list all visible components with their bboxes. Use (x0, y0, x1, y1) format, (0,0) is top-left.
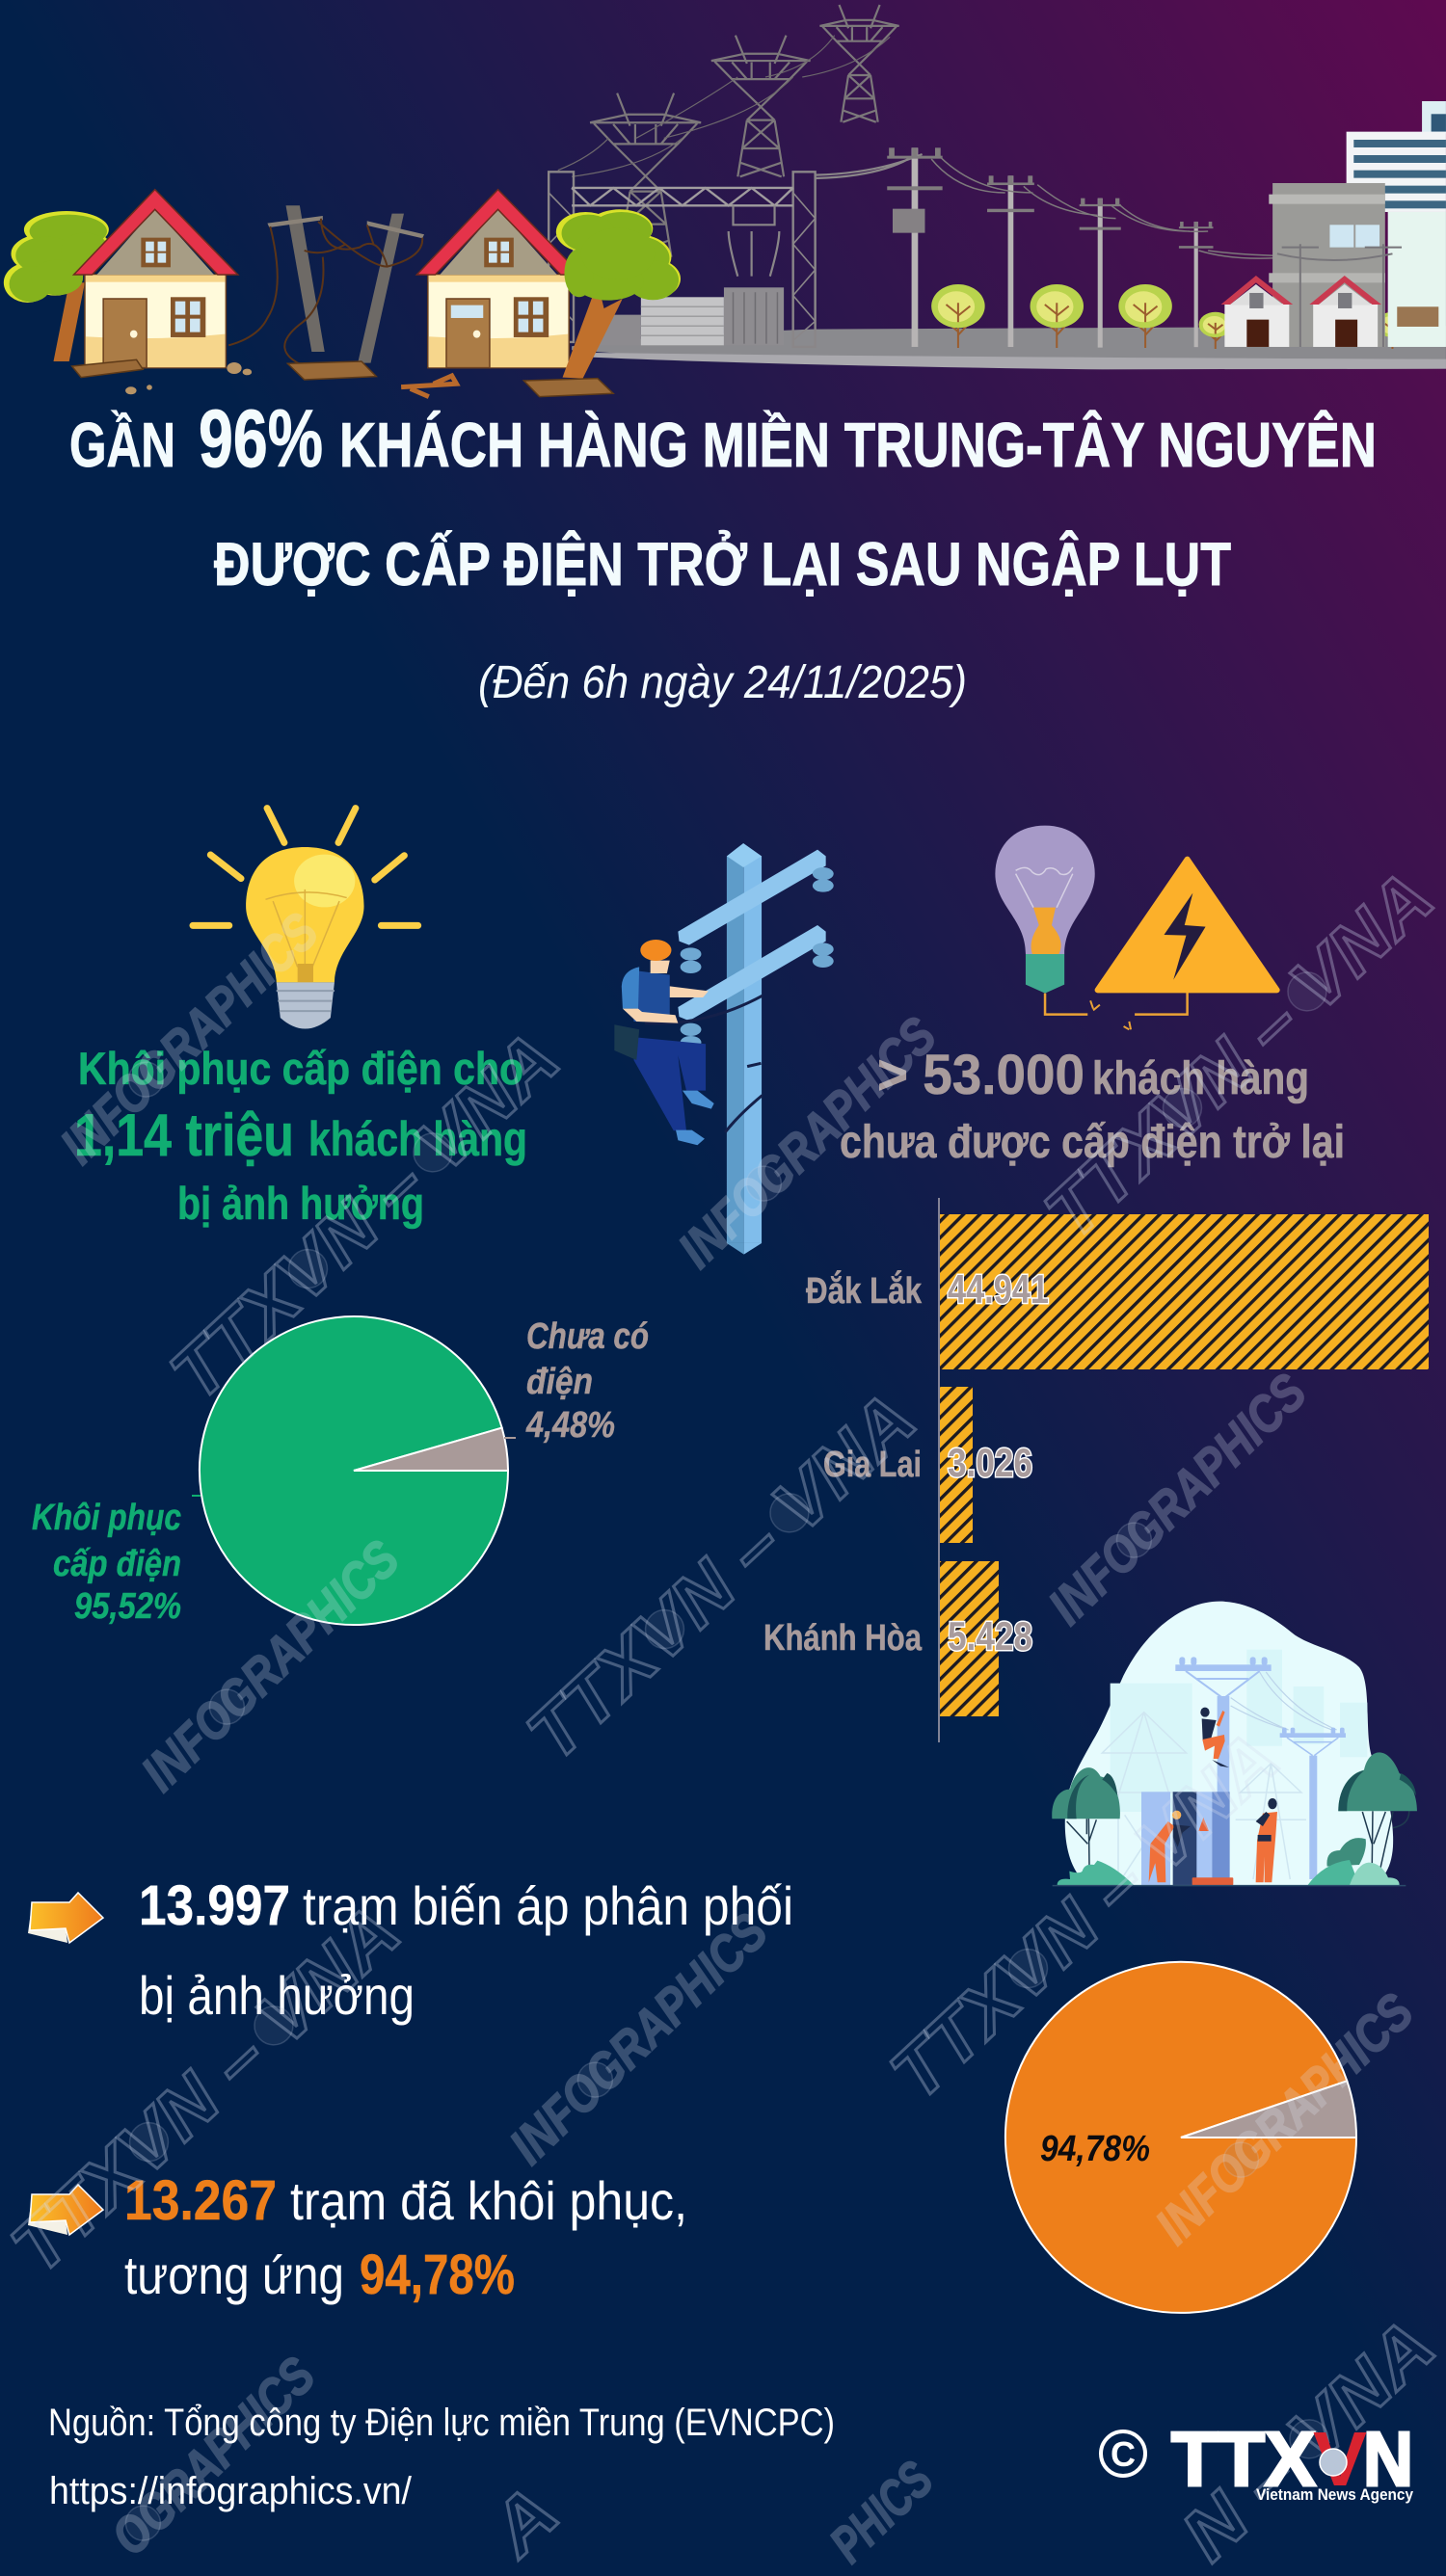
date subtitle: (Đến 6h ngày 24/11/2025) (478, 657, 967, 708)
trees and bushes (1052, 1752, 1417, 1886)
TTXVN logo: N (1363, 2416, 1413, 2502)
text: affected transformer stations: bị ảnh hưởng (139, 1965, 415, 2026)
text: restored transformer stations: tương ứng (124, 2244, 344, 2305)
bar: Khánh Hòa: Khánh Hòa (763, 1618, 923, 1659)
illustration: power grid scene with damaged homes (4, 5, 1446, 397)
title: GẦN (69, 410, 175, 480)
substation gantry and transformer (549, 154, 923, 347)
text: affected transformer stations (139, 1874, 793, 2026)
worker figure (614, 940, 714, 1145)
bar: Khánh Hòa (763, 1561, 1032, 1716)
utility poles (887, 147, 1309, 348)
watermarks: INFOGRAPHICS (499, 1902, 779, 2175)
text: restored transformer stations: 94,78% (360, 2244, 515, 2306)
bar: Đắk Lắk (806, 1214, 1429, 1369)
TTXVN logo: Vietnam News Agency (1256, 2485, 1413, 2504)
transmission towers (558, 5, 899, 257)
icon: glowing light bulb (193, 809, 418, 1029)
source text: https://infographics.vn/ (49, 2470, 413, 2512)
text: customers restored: 1,14 triệu (74, 1102, 294, 1169)
text: customers without power: > 53.000 (877, 1044, 1084, 1106)
text: affected transformer stations: trạm biến áp phân phối (303, 1875, 793, 1936)
watermarks: TTXVN – VNA (0, 1891, 415, 2289)
watermarks: N – VNA (1166, 2304, 1446, 2576)
pie label: no power: 4,48% (525, 1405, 615, 1446)
pie chart: restored share (32, 1316, 649, 1627)
watermarks (0, 857, 1446, 2576)
pie label: restored (32, 1498, 181, 1627)
text: customers without power: chưa được cấp điện trở lại (840, 1117, 1345, 1168)
watermarks: INFOGRAPHICS (50, 902, 330, 1175)
TTXVN logo: TTX (1171, 2416, 1316, 2502)
text: customers restored: Khôi phục cấp điện cho (78, 1043, 523, 1094)
source text (48, 2402, 835, 2512)
watermarks: TTXVN – VNA (875, 1717, 1295, 2115)
watermarks: TTXVN – VNA (155, 1018, 575, 1416)
TTXVN logo: V (1313, 2416, 1367, 2502)
illustration: repair crew at power pole (1052, 1602, 1417, 1886)
broken electric poles with wires (72, 205, 457, 397)
bar: Gia Lai (823, 1387, 1032, 1543)
watermarks: INFOGRAPHICS (1038, 1363, 1318, 1635)
pie label: restored: Khôi phục (32, 1498, 181, 1538)
TTXVN logo (1101, 2416, 1413, 2504)
TTXVN logo: C (1111, 2434, 1136, 2474)
bar: Đắk Lắk: Đắk Lắk (806, 1269, 923, 1312)
illustration: worker climbing electric pole (614, 843, 834, 1255)
bar: Gia Lai: 3.026 (948, 1440, 1032, 1485)
bar: Gia Lai: Gia Lai (823, 1445, 922, 1485)
text: customers without power (840, 1044, 1345, 1168)
text: customers restored: bị ảnh hưởng (177, 1178, 424, 1229)
icon: broken bulb and warning triangle (995, 826, 1277, 1029)
right standing worker (1256, 1798, 1277, 1882)
climbing worker (1200, 1708, 1229, 1767)
city buildings (1221, 101, 1446, 347)
pie label: no power (525, 1316, 649, 1446)
bar: Đắk Lắk: 44.941 (948, 1266, 1049, 1312)
source text: Nguồn: Tổng công ty Điện lực miền Trung (EVNCPC) (48, 2402, 835, 2444)
watermarks: A (473, 2471, 574, 2572)
watermarks: PHICS (819, 2451, 944, 2574)
text: customers restored (74, 1043, 527, 1229)
bar: Khánh Hòa: 5.428 (948, 1613, 1032, 1659)
right house with tree (416, 190, 681, 397)
text: restored transformer stations: 13.267 (124, 2169, 277, 2232)
left house with tree (4, 190, 238, 368)
pie chart: restored stations: 94,78% (1040, 2129, 1150, 2169)
watermarks: OGRAPHICS (101, 2347, 326, 2566)
watermarks: INFOGRAPHICS (668, 1006, 948, 1279)
roadside trees (931, 284, 1409, 349)
text: affected transformer stations: 13.997 (139, 1874, 290, 1937)
watermarks: INFOGRAPHICS (131, 1529, 411, 1802)
title: ĐƯỢC CẤP ĐIỆN TRỞ LẠI SAU NGẬP LỤT (214, 530, 1231, 598)
pie label: no power: Chưa có (526, 1316, 649, 1357)
watermarks: TTXVN – VNA (1030, 857, 1446, 1255)
bar chart: customers without power by province (763, 1198, 1429, 1742)
text: customers restored: khách hàng (308, 1112, 527, 1166)
ground road (572, 326, 1446, 369)
left bending worker (1149, 1811, 1191, 1882)
arrow bullet 1 (28, 1893, 103, 1943)
arrow bullet 2 (28, 2185, 103, 2235)
electrical cabinet (1141, 1792, 1233, 1885)
pie chart: restored stations (1005, 1962, 1356, 2313)
pie label: restored: cấp điện (53, 1544, 181, 1584)
text: restored transformer stations (124, 2169, 687, 2306)
text: restored transformer stations: trạm đã khôi phục, (290, 2170, 687, 2231)
text: customers without power: khách hàng (1092, 1053, 1309, 1104)
title: 96% (199, 393, 323, 484)
pie label: no power: điện (526, 1362, 593, 1402)
pie label: restored: 95,52% (74, 1586, 181, 1627)
title (69, 393, 1377, 598)
watermarks: TTXVN – VNA (512, 1378, 931, 1776)
